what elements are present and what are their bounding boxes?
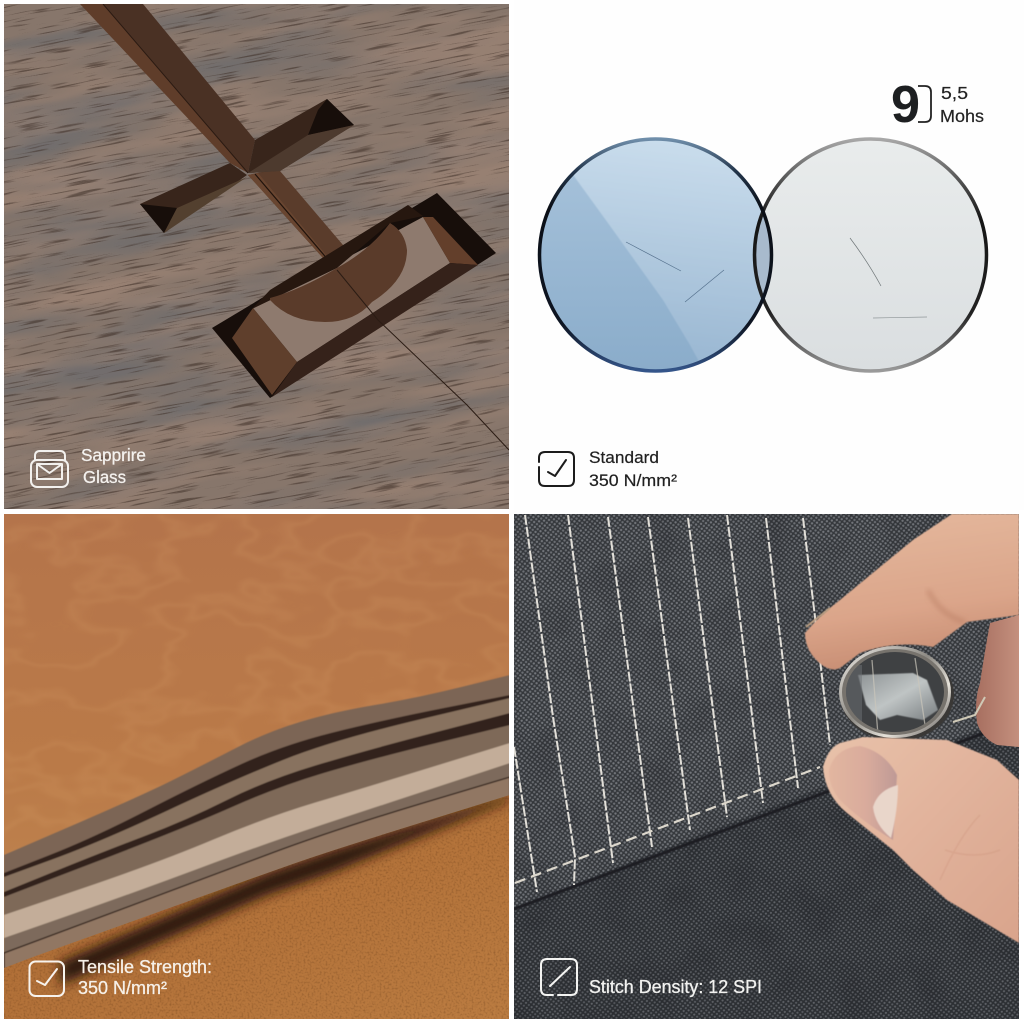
caption: tensile strength: Tensile Strength: [78, 957, 212, 977]
clear glass disc [754, 139, 986, 371]
lower leather sheet [4, 780, 510, 1020]
thumbnail [829, 746, 898, 840]
caption: Sapprire Glass: Sapprire [81, 445, 146, 465]
panel: glass hardness comparison [538, 85, 988, 487]
caption: Standard [539, 448, 677, 490]
stacked cross-section layers [4, 674, 509, 968]
caption: stitch density: Stitch Density: 12 SPI [589, 977, 762, 997]
magnifier ring [839, 646, 954, 741]
blue sapphire disc [541, 140, 770, 370]
caption: tensile strength: 350 N/mm² [78, 978, 167, 998]
index knuckle crease [928, 590, 965, 622]
icon: check box [30, 962, 64, 996]
hardness badge: 9 [891, 76, 920, 134]
caption: stitch density [541, 959, 762, 997]
thread loop [953, 697, 985, 722]
recessed pocket with raised block [212, 193, 509, 450]
cross arm: right [248, 99, 354, 173]
hand: middle finger [976, 615, 1019, 747]
thumb knuckle creases [947, 825, 972, 854]
disc rims [540, 139, 986, 371]
hardness badge: Mohs [940, 106, 984, 126]
panel: canvas stitching with loupe [514, 514, 1019, 1019]
caption: Standard: 350 N/mm² [589, 471, 677, 490]
panel: layered leather [4, 514, 510, 1020]
caption: Sapprire Glass [31, 445, 146, 487]
caption: Sapprire Glass: Glass [83, 467, 126, 487]
shadow under layers [60, 795, 510, 985]
lower canvas sheet [514, 715, 1019, 1019]
icon: slash box [541, 959, 577, 995]
hand: thumb [823, 737, 1019, 943]
hardness badge [891, 76, 984, 134]
seam stitches [515, 767, 820, 883]
half-circle inlay [270, 223, 407, 322]
hardness badge: 5,5 [941, 83, 968, 103]
seam fold [514, 732, 984, 911]
vertical stitch lines [514, 515, 830, 892]
long routed groove [80, 4, 343, 268]
icon: check box [539, 452, 574, 486]
caption: Standard: Standard [589, 448, 659, 467]
icon: envelope [31, 451, 68, 487]
panel: walnut wood joint [4, 4, 509, 509]
caption: tensile strength [30, 957, 212, 998]
hand: index finger [805, 514, 1019, 669]
cross arm: left [140, 163, 247, 233]
index fingernail edge [806, 608, 830, 627]
